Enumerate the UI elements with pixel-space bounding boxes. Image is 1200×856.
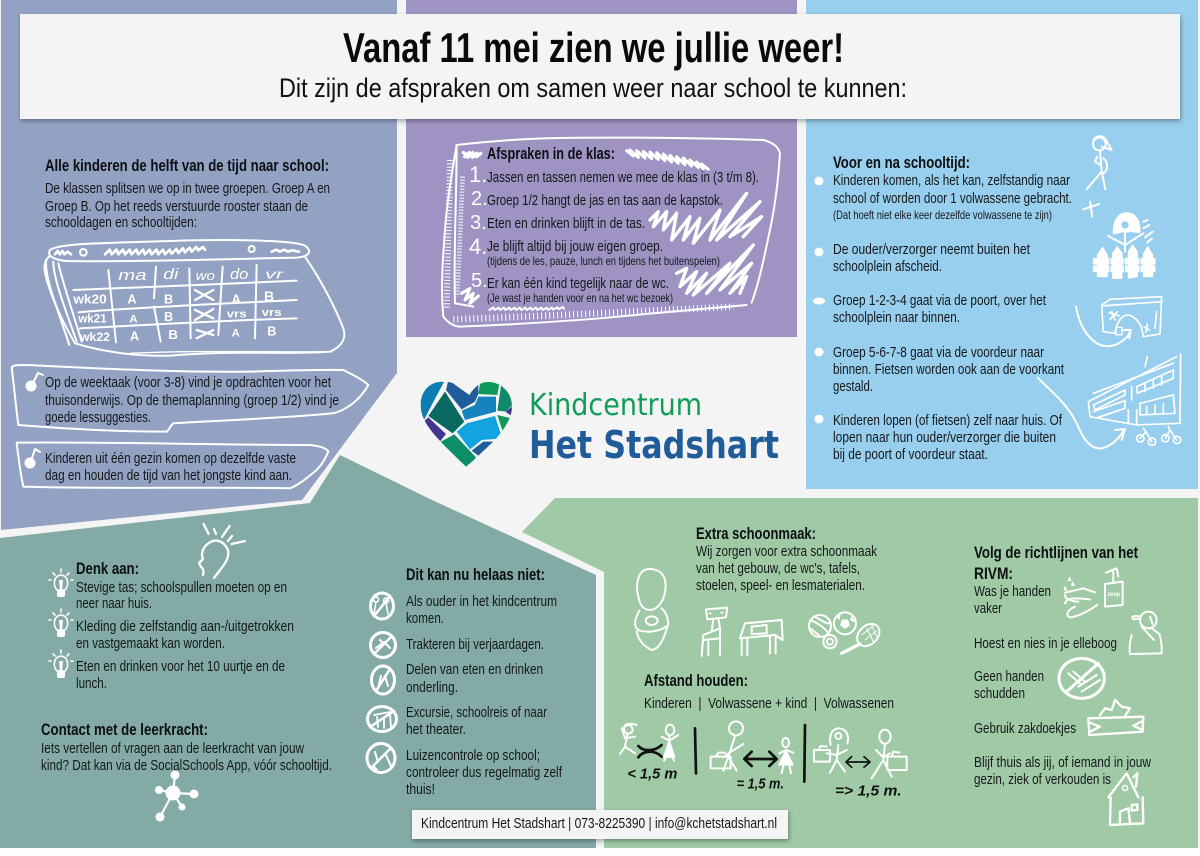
footer contact bar xyxy=(412,810,788,839)
icon: hand-drawn rooster table: A xyxy=(232,292,241,306)
text block: contact: kind? Dat kan via de SocialSchools App, vóór schooltijd. xyxy=(41,757,332,774)
text block: regels: Groep 1/2 hangt de jas en tas aan de kapstok. xyxy=(487,192,723,209)
text block: schooltijd regels: schoolplein afscheid. xyxy=(833,258,942,275)
icon: toilet xyxy=(635,569,668,650)
logo text: Kindcentrum: Kindcentrum xyxy=(529,388,702,423)
text block: schooltijd regels: Groep 5-6-7-8 gaat via de voordeur naar xyxy=(833,344,1044,361)
icon: hand-drawn rooster table: wk22 xyxy=(79,330,110,344)
text block: denk aan: neer naar huis. xyxy=(76,595,152,612)
icon: two children too close xyxy=(620,724,678,761)
icon: hand-drawn rooster table: B xyxy=(264,288,274,304)
text block: helaas niet: Als ouder in het kindcentrum xyxy=(406,593,557,610)
bullets xyxy=(813,176,825,424)
callout: weektaak: goede lessuggesties. xyxy=(45,409,151,426)
icon: no excursion xyxy=(368,706,396,732)
text block: regels: (Je wast je handen voor en na het wc bezoek) xyxy=(487,291,673,305)
text block: RIVM rules: gezin, ziek of verkouden is xyxy=(974,771,1111,788)
icon: walking child xyxy=(1087,136,1112,189)
text block: denk aan: en vastgemaakt kan worden. xyxy=(76,635,225,652)
icon: hand-drawn rooster table: ma xyxy=(118,268,147,284)
icon: mosaic heart xyxy=(420,382,512,466)
text block: RIVM rules: Hoest en nies in je elleboog xyxy=(974,635,1117,652)
heading: alle kinderen: Alle kinderen de helft van de tijd naar school: xyxy=(45,157,329,175)
heading: afspraken: Afspraken in de klas: xyxy=(487,145,615,163)
text block: denk aan: lunch. xyxy=(76,675,107,692)
text block: RIVM rules: vaker xyxy=(974,600,1002,617)
header banner xyxy=(20,14,1180,119)
icons: school route drawings xyxy=(1038,136,1181,448)
icon: hand-drawn rooster table: A xyxy=(232,328,240,340)
text block: schooltijd regels: De ouder/verzorger neemt buiten het xyxy=(833,241,1031,258)
text block: schooltijd regels: Groep 1-2-3-4 gaat via de poort, over het xyxy=(833,292,1047,309)
icon: note bullet xyxy=(24,449,40,468)
heading: dit kan nu helaas niet: Dit kan nu helaas niet: xyxy=(406,566,545,584)
text block: schoonmaak: Wij zorgen voor extra schoonmaak xyxy=(696,543,877,560)
icon: table xyxy=(740,620,783,655)
text block: schooltijd regels: lopen naar hun ouder/verzorger die buiten xyxy=(833,429,1056,446)
icon: hand-drawn rooster table: B xyxy=(168,327,178,342)
label: more than 1,5 m: => 1,5 m. xyxy=(835,783,902,799)
icon: lightbulb 1 xyxy=(49,569,73,597)
heading: RIVM: Volg de richtlijnen van het xyxy=(974,544,1138,562)
text block: regels: Jassen en tassen nemen we mee de klas in (3 t/m 8). xyxy=(487,169,759,186)
text block: regels: (tijdens de les, pauze, lunch en tijdens het buitenspelen) xyxy=(487,254,720,268)
icon: note bullet xyxy=(26,373,43,392)
icon: hand-drawn rooster table: A xyxy=(127,292,136,306)
heading: voor en na schooltijd: Voor en na schooltijd: xyxy=(833,154,970,172)
text block: helaas niet: Excursie, schoolreis of naar xyxy=(406,704,547,721)
heading: RIVM xyxy=(974,544,1138,583)
footer contact bar: Kindcentrum Het Stadshart | 073-8225390 | info@kchetstadshart.nl xyxy=(421,815,777,832)
text block: regels: Eten en drinken blijft in de tas. xyxy=(487,215,645,232)
icon: washing hands with soap: zeep xyxy=(1107,591,1120,598)
divider bar one xyxy=(691,728,700,773)
icon: no treats xyxy=(370,632,396,658)
text block: klassen splitsen: Groep B. Op het reeds verstuurde rooster staan de xyxy=(45,198,308,215)
heading: afstand houden: Afstand houden: xyxy=(644,672,748,690)
icon: hand-drawn rooster table xyxy=(44,240,344,356)
text block: RIVM rules: Was je handen xyxy=(974,583,1051,600)
callout: weektaak xyxy=(12,365,368,432)
text block: RIVM rules: Gebruik zakdoekjes xyxy=(974,720,1076,737)
text block: RIVM rules: schudden xyxy=(974,685,1025,702)
text block: klassen splitsen: schooldagen en schooltijden: xyxy=(45,214,197,231)
text block: schooltijd regels: schoolplein naar binnen. xyxy=(833,309,960,326)
text block: contact: Iets vertellen of vragen aan de leerkracht van jouw xyxy=(41,740,304,757)
icon: toys and balls xyxy=(809,612,884,653)
icon: no handshake xyxy=(1059,658,1104,698)
icon: plus xyxy=(1083,202,1099,217)
text: afstand categories: Kinderen | Volwassene + kind | Volwassenen xyxy=(644,695,894,712)
numbers list xyxy=(469,162,488,292)
text block: helaas niet xyxy=(406,593,563,798)
icon: hand-drawn rooster table: wk20 xyxy=(72,292,107,306)
heading: extra schoonmaak: Extra schoonmaak: xyxy=(696,525,816,543)
text block: RIVM rules: Geen handen xyxy=(974,668,1044,685)
text block: helaas niet: het theater. xyxy=(406,721,466,738)
icon: hand-drawn rooster table: A xyxy=(130,329,139,343)
panel: denk aan, contact en helaas niet xyxy=(0,455,596,848)
divider bar two xyxy=(800,725,809,782)
text block: denk aan xyxy=(76,579,294,692)
icon: two adults xyxy=(814,728,907,778)
chalkboard frame xyxy=(442,138,780,327)
panel: voor en na schooltijd xyxy=(806,0,1198,489)
heading: contact met de leerkracht: Contact met de leerkracht: xyxy=(41,721,208,739)
numbers list: 1. xyxy=(469,162,487,187)
heading: denk aan: Denk aan: xyxy=(76,560,139,578)
numbers list: 4. xyxy=(469,234,487,259)
icon: hand-drawn rooster table: do xyxy=(230,267,248,283)
icons: schoonmaak and afstand drawings xyxy=(620,569,907,799)
icon: chair xyxy=(702,608,727,656)
text block: schooltijd regels xyxy=(833,172,1072,463)
icon: head with rays xyxy=(199,524,245,578)
panel: schoonmaak, afstand en RIVM xyxy=(522,498,1198,848)
icon: hand-drawn rooster table: vrs xyxy=(262,307,282,319)
text block: klassen splitsen: De klassen splitsen we op in twee groepen. Groep A en xyxy=(45,180,330,197)
text block: helaas niet: komen. xyxy=(406,610,444,627)
text block: denk aan: Eten en drinken voor het 10 uurtje en de xyxy=(76,658,285,675)
text block: denk aan: Stevige tas; schoolspullen moeten op en xyxy=(76,579,287,596)
icon: hand-drawn rooster table: B xyxy=(267,325,276,339)
text block: helaas niet: controleer dus regelmatig zelf xyxy=(406,764,563,781)
text block: helaas niet: onderling. xyxy=(406,679,458,696)
text block: schooltijd regels: gestald. xyxy=(833,378,873,395)
icon: school building with arrow and bikes xyxy=(1038,354,1181,448)
icon: no lice control xyxy=(367,744,395,772)
icon: gate with arrow xyxy=(1076,297,1162,346)
panel: afspraken in de klas xyxy=(406,0,797,337)
callout: gezin: Kinderen uit één gezin komen op dezelfde vaste xyxy=(45,450,296,467)
text block: RIVM rules xyxy=(974,583,1151,788)
heading: RIVM: RIVM: xyxy=(974,565,1013,583)
callout: gezin xyxy=(17,442,328,488)
text block: schooltijd regels: Kinderen komen, als het kan, zelfstandig naar xyxy=(833,172,1070,189)
icon: adult with child xyxy=(711,721,793,773)
panel: alle kinderen de helft van de tijd xyxy=(1,0,397,530)
icon: hand-drawn rooster table: vr xyxy=(265,266,284,281)
icon: hand-drawn rooster table: A xyxy=(129,313,138,325)
logo: Kindcentrum Het Stadshart xyxy=(417,380,779,470)
text block: regels: Er kan één kind tegelijk naar de wc. xyxy=(487,275,669,292)
text block: helaas niet: thuis! xyxy=(406,781,435,798)
icon: no parents xyxy=(370,593,394,619)
text block: denk aan: Kleding die zelfstandig aan-/uitgetrokken xyxy=(76,618,294,635)
icon: washing hands with soap xyxy=(1064,568,1123,617)
icon: house xyxy=(1108,773,1143,825)
icons: RIVM drawings xyxy=(1059,568,1162,825)
text block: contact xyxy=(41,740,332,774)
icon: hand-drawn rooster table: di xyxy=(163,267,179,283)
text block: schoonmaak: stoelen, speel- en lesmaterialen. xyxy=(696,577,865,594)
logo text: Het Stadshart: Het Stadshart xyxy=(529,423,779,467)
icon: hand-drawn rooster table: B xyxy=(164,310,173,324)
icon: waving parent behind fence xyxy=(1093,213,1155,278)
callout: weektaak: Op de weektaak (voor 3-8) vind je opdrachten voor het xyxy=(45,374,332,391)
text block: schooltijd regels: Kinderen lopen (of fietsen) zelf naar huis. Of xyxy=(833,412,1063,429)
icon: network xyxy=(155,770,198,822)
text block: klassen splitsen xyxy=(45,180,330,231)
text block: schooltijd regels: bij de poort of voordeur staat. xyxy=(833,446,988,463)
icon: hand-drawn rooster table: wk21 xyxy=(77,311,107,325)
text block: schooltijd regels: (Dat hoeft niet elke keer dezelfde volwassene te zijn) xyxy=(833,208,1052,222)
icon: hand-drawn rooster table: B xyxy=(164,292,173,306)
label: less than 1,5 m: < 1,5 m xyxy=(627,767,677,783)
icon: hand-drawn rooster table: wo xyxy=(196,268,215,283)
icon: lightbulb 3 xyxy=(49,650,73,678)
icon: hand-drawn rooster table: vrs xyxy=(227,309,247,321)
label: equal to 1,5 m: = 1,5 m. xyxy=(737,777,784,793)
callout: gezin: dag en houden de tijd van het jongste kind aan. xyxy=(45,467,292,484)
icon: no sharing xyxy=(372,666,394,694)
numbers list: 3. xyxy=(470,212,487,234)
text block: schooltijd regels: binnen. Fietsen worden ook aan de voorkant xyxy=(833,361,1065,378)
icon: tissues xyxy=(1088,700,1143,735)
text block: schoonmaak xyxy=(696,543,877,594)
icon: lightbulb 2 xyxy=(49,609,73,637)
text block: RIVM rules: Blijf thuis als jij, of iemand in jouw xyxy=(974,754,1151,771)
text block: helaas niet: Luizencontrole op school; xyxy=(406,747,540,764)
numbers list: 2. xyxy=(471,188,488,210)
subtitle: Dit zijn de afspraken om samen weer naar school te kunnen: xyxy=(279,73,907,103)
text block: helaas niet: Trakteren bij verjaardagen. xyxy=(406,636,544,653)
numbers list: 5. xyxy=(471,270,488,292)
text block: regels xyxy=(487,169,759,305)
text block: schoonmaak: van het gebouw, de wc's, tafels, xyxy=(696,560,860,577)
callout: weektaak: thuisonderwijs. Op de themaplanning (groep 1/2) vind je xyxy=(45,392,339,409)
icon: coughing person xyxy=(1130,612,1162,654)
text block: schooltijd regels: school of worden door 1 volwassene gebracht. xyxy=(833,190,1072,207)
title: Vanaf 11 mei zien we jullie weer! xyxy=(343,24,844,71)
text block: regels: Je blijft altijd bij jouw eigen groep. xyxy=(487,238,663,255)
text block: helaas niet: Delen van eten en drinken xyxy=(406,661,543,678)
